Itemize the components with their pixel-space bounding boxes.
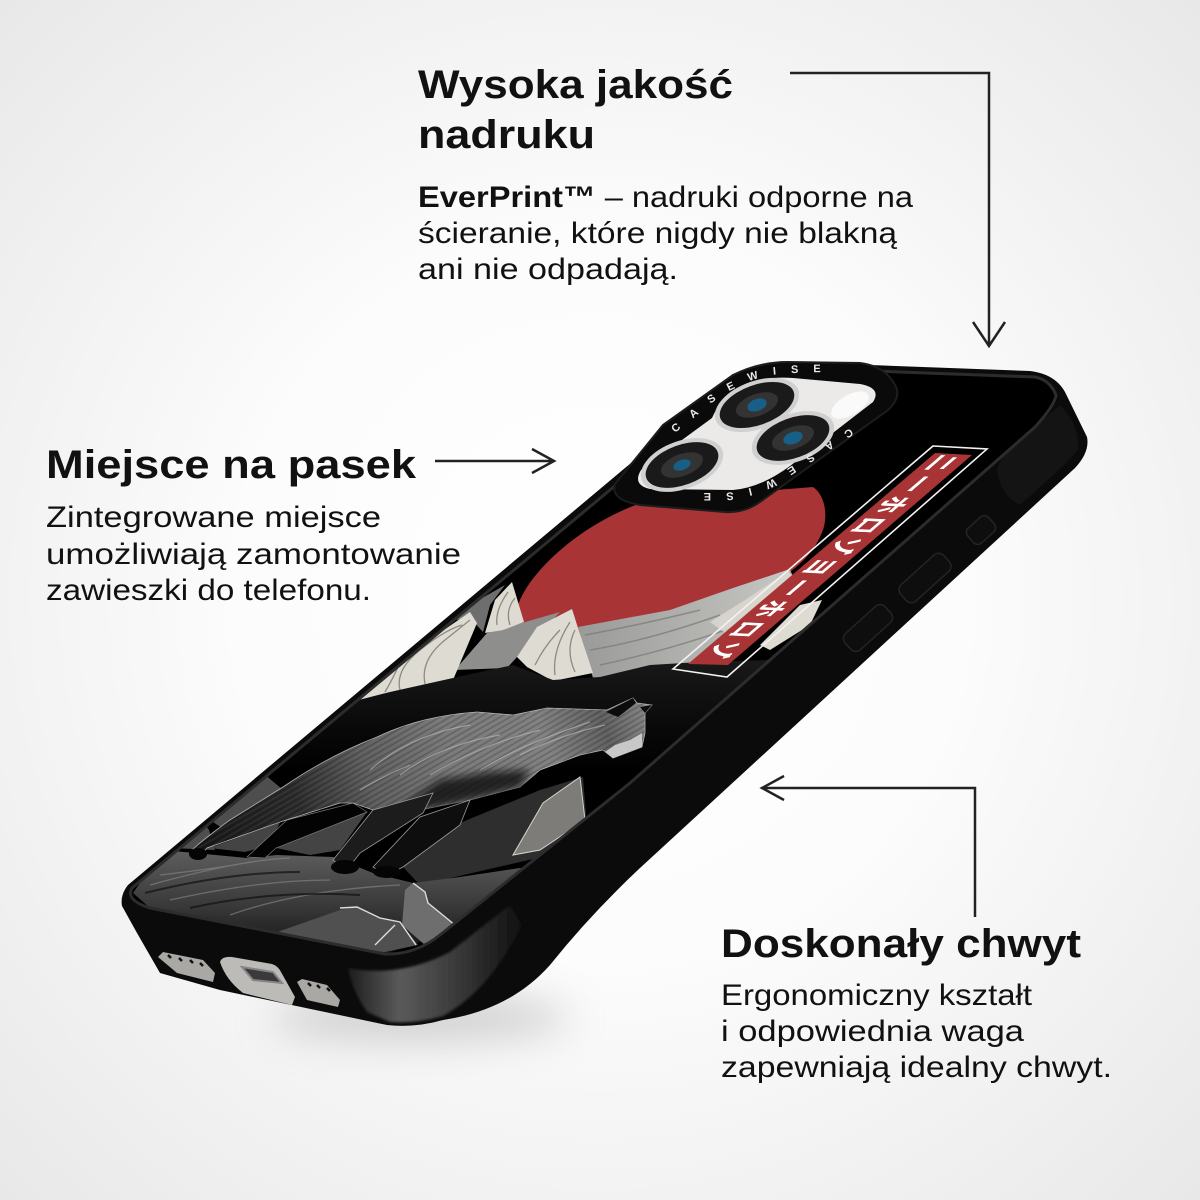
grey rock behind bear legs xyxy=(210,812,367,855)
banner outline xyxy=(673,446,987,677)
usb-c port xyxy=(220,957,295,1005)
red banner xyxy=(688,453,972,665)
text block: print quality description: EverPrint™ – nadruki odporne na xyxy=(418,181,913,214)
lens left xyxy=(633,428,731,502)
phone case xyxy=(122,361,1088,1026)
side sculpted bump xyxy=(997,405,1078,505)
bear muzzle xyxy=(605,733,642,758)
text block: print quality description: ani nie odpadają. xyxy=(418,253,678,286)
arrow: print quality to phone back xyxy=(790,73,1005,346)
heading: print quality xyxy=(418,63,733,157)
bear xyxy=(189,698,652,878)
camera white plate xyxy=(638,378,876,490)
text block: print quality description xyxy=(418,181,913,286)
snowy peaks xyxy=(345,570,822,705)
bear paws xyxy=(189,848,401,878)
banner text: ニーホロゾヨーホロゾ xyxy=(692,454,966,663)
text block: grip description: Ergonomiczny kształt xyxy=(721,979,1033,1012)
arrow: strap slot to phone xyxy=(435,449,554,473)
text block: print quality description: ścieranie, które nigdy nie blakną xyxy=(418,217,897,250)
distant right mountain xyxy=(403,777,586,885)
ground rock layers xyxy=(133,852,522,952)
bear belly shadow xyxy=(400,770,530,810)
glossy bottom corner xyxy=(348,905,522,1022)
bear body xyxy=(192,698,652,858)
heading: strap slot: Miejsce na pasek xyxy=(46,443,417,487)
printed artwork xyxy=(132,373,1054,952)
heading: print quality: nadruku xyxy=(418,113,595,157)
artwork rim xyxy=(130,368,1056,954)
text block: strap slot description: zawieszki do telefonu. xyxy=(46,574,371,607)
ridge strata xyxy=(585,610,740,665)
phone shadow xyxy=(270,994,570,1042)
left speaker xyxy=(158,952,215,982)
side buttons xyxy=(841,513,998,654)
case body xyxy=(122,362,1088,1026)
lens top xyxy=(707,367,807,443)
camera ring branding: CASEWISE xyxy=(672,364,820,432)
text block: grip description: i odpowiednia waga xyxy=(721,1015,1024,1048)
right speaker xyxy=(297,979,340,1007)
camera ring xyxy=(614,362,897,512)
camera module xyxy=(614,361,898,514)
text block: grip description: zapewniają idealny chwyt. xyxy=(721,1051,1112,1084)
arrow: grip to phone side xyxy=(762,776,975,917)
text block: grip description xyxy=(721,979,1112,1084)
text block: strap slot description xyxy=(46,501,461,607)
foreground peaks xyxy=(278,908,418,952)
snow contour lines xyxy=(385,592,575,692)
dark hill xyxy=(324,660,768,732)
text block: strap slot description: umożliwiają zamontowanie xyxy=(46,538,461,571)
far grey slope xyxy=(456,585,505,632)
far mountain ridge xyxy=(578,570,800,678)
text block: strap slot description: Zintegrowane miejsce xyxy=(46,501,381,534)
ground rock texture xyxy=(150,858,400,915)
middle grey ridge xyxy=(455,612,560,670)
bear ears xyxy=(606,698,652,717)
bear front leg xyxy=(333,793,433,870)
flash xyxy=(827,386,873,424)
bear far front leg xyxy=(373,800,470,875)
left rocks xyxy=(182,777,280,850)
heading: print quality: Wysoka jakość xyxy=(418,63,733,107)
bear fur highlights xyxy=(360,722,605,790)
heading: grip: Doskonały chwyt xyxy=(721,922,1081,966)
camera module: CASEWISE xyxy=(704,430,852,500)
lens right xyxy=(744,401,842,475)
bear far hind leg xyxy=(247,803,367,858)
red sun xyxy=(518,487,825,640)
artwork background xyxy=(132,373,1054,952)
snowy mountain peak xyxy=(513,777,585,855)
